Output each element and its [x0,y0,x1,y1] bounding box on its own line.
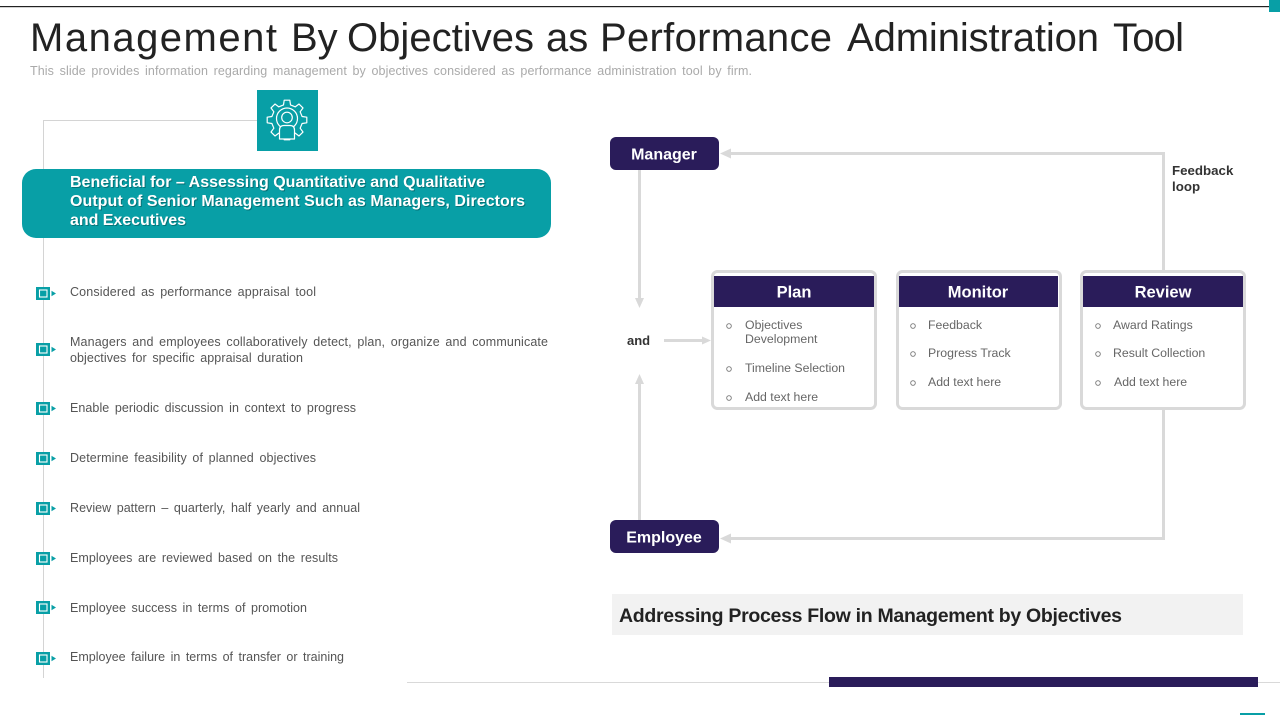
card: plan: Timeline Selection [745,361,845,375]
label: feedback loop [1172,163,1234,194]
card: review [1082,272,1244,408]
arrow: and to plan [664,336,711,344]
bullet: promotion: Employee success in terms of promotion [70,601,307,615]
bullet: review pattern: Review pattern – quarterly, half yearly and annual [70,501,360,515]
arrow: employee up to and [635,374,644,520]
title: as [546,16,588,60]
arrow: feedback loop to manager [720,148,1164,271]
card: monitor: Add text here [928,375,1001,389]
node: manager: Manager [631,146,697,164]
caption: process flow: Addressing Process Flow in Management by Objectives [619,605,1122,627]
card: plan: Plan [777,284,811,302]
subtitle: This slide provides information regarding management by objectives considered as performance administration tool by firm. [30,64,752,78]
bullet: transfer or training: Employee failure in terms of transfer or training [70,650,344,664]
card: plan: Add text here [745,390,818,404]
card: plan: Development [745,332,818,346]
card: review: Award Ratings [1113,318,1193,332]
bullet: collaboratively detect: Managers and employees collaboratively detect, plan, organize and communicate [70,335,548,349]
bullet: collaboratively detect [36,335,548,365]
title: Tool [1113,16,1184,60]
callout: beneficial for [22,169,551,238]
footer accent [1240,713,1265,715]
node: employee [610,520,719,553]
bullet: periodic discussion: Enable periodic discussion in context to progress [70,401,356,415]
arrow: manager down to and [635,170,644,308]
callout: beneficial for: Output of Senior Management Such as Managers, Directors [70,193,525,210]
bullet: collaboratively detect: objectives for specific appraisal duration [70,351,303,365]
node: manager [610,137,719,170]
card: review: Add text here [1114,375,1187,389]
title: Management [30,16,277,60]
callout: beneficial for: and Executives [70,212,186,229]
card: monitor [898,272,1060,408]
card: review: Review [1135,284,1192,302]
top rule [0,0,1280,12]
label: feedback loop: Feedback [1172,163,1234,178]
bullet: appraisal tool: Considered as performance appraisal tool [70,285,316,299]
bullet: feasibility: Determine feasibility of planned objectives [70,451,316,465]
card: monitor: Monitor [948,284,1009,302]
arrow: review to employee [720,409,1164,544]
card: review: Result Collection [1113,346,1205,360]
card: plan [712,272,876,408]
title: By [291,16,338,60]
caption: process flow [612,594,1243,635]
card: monitor: Progress Track [928,346,1012,360]
bullet: reviewed on results: Employees are reviewed based on the results [70,551,338,565]
node: employee: Employee [626,530,702,546]
left panel: bracket line [44,120,257,678]
icon: gear with person [257,90,318,151]
label: feedback loop: loop [1172,179,1200,194]
title: Administration [847,16,1099,60]
card: monitor: Feedback [928,318,983,332]
card: plan: Objectives [745,318,802,332]
callout: beneficial for: Beneficial for – Assessing Quantitative and Qualitative [70,174,485,191]
footer rule [407,677,1280,687]
title: Objectives [347,16,534,60]
title: Performance [600,16,832,60]
label: and: and [627,333,650,348]
